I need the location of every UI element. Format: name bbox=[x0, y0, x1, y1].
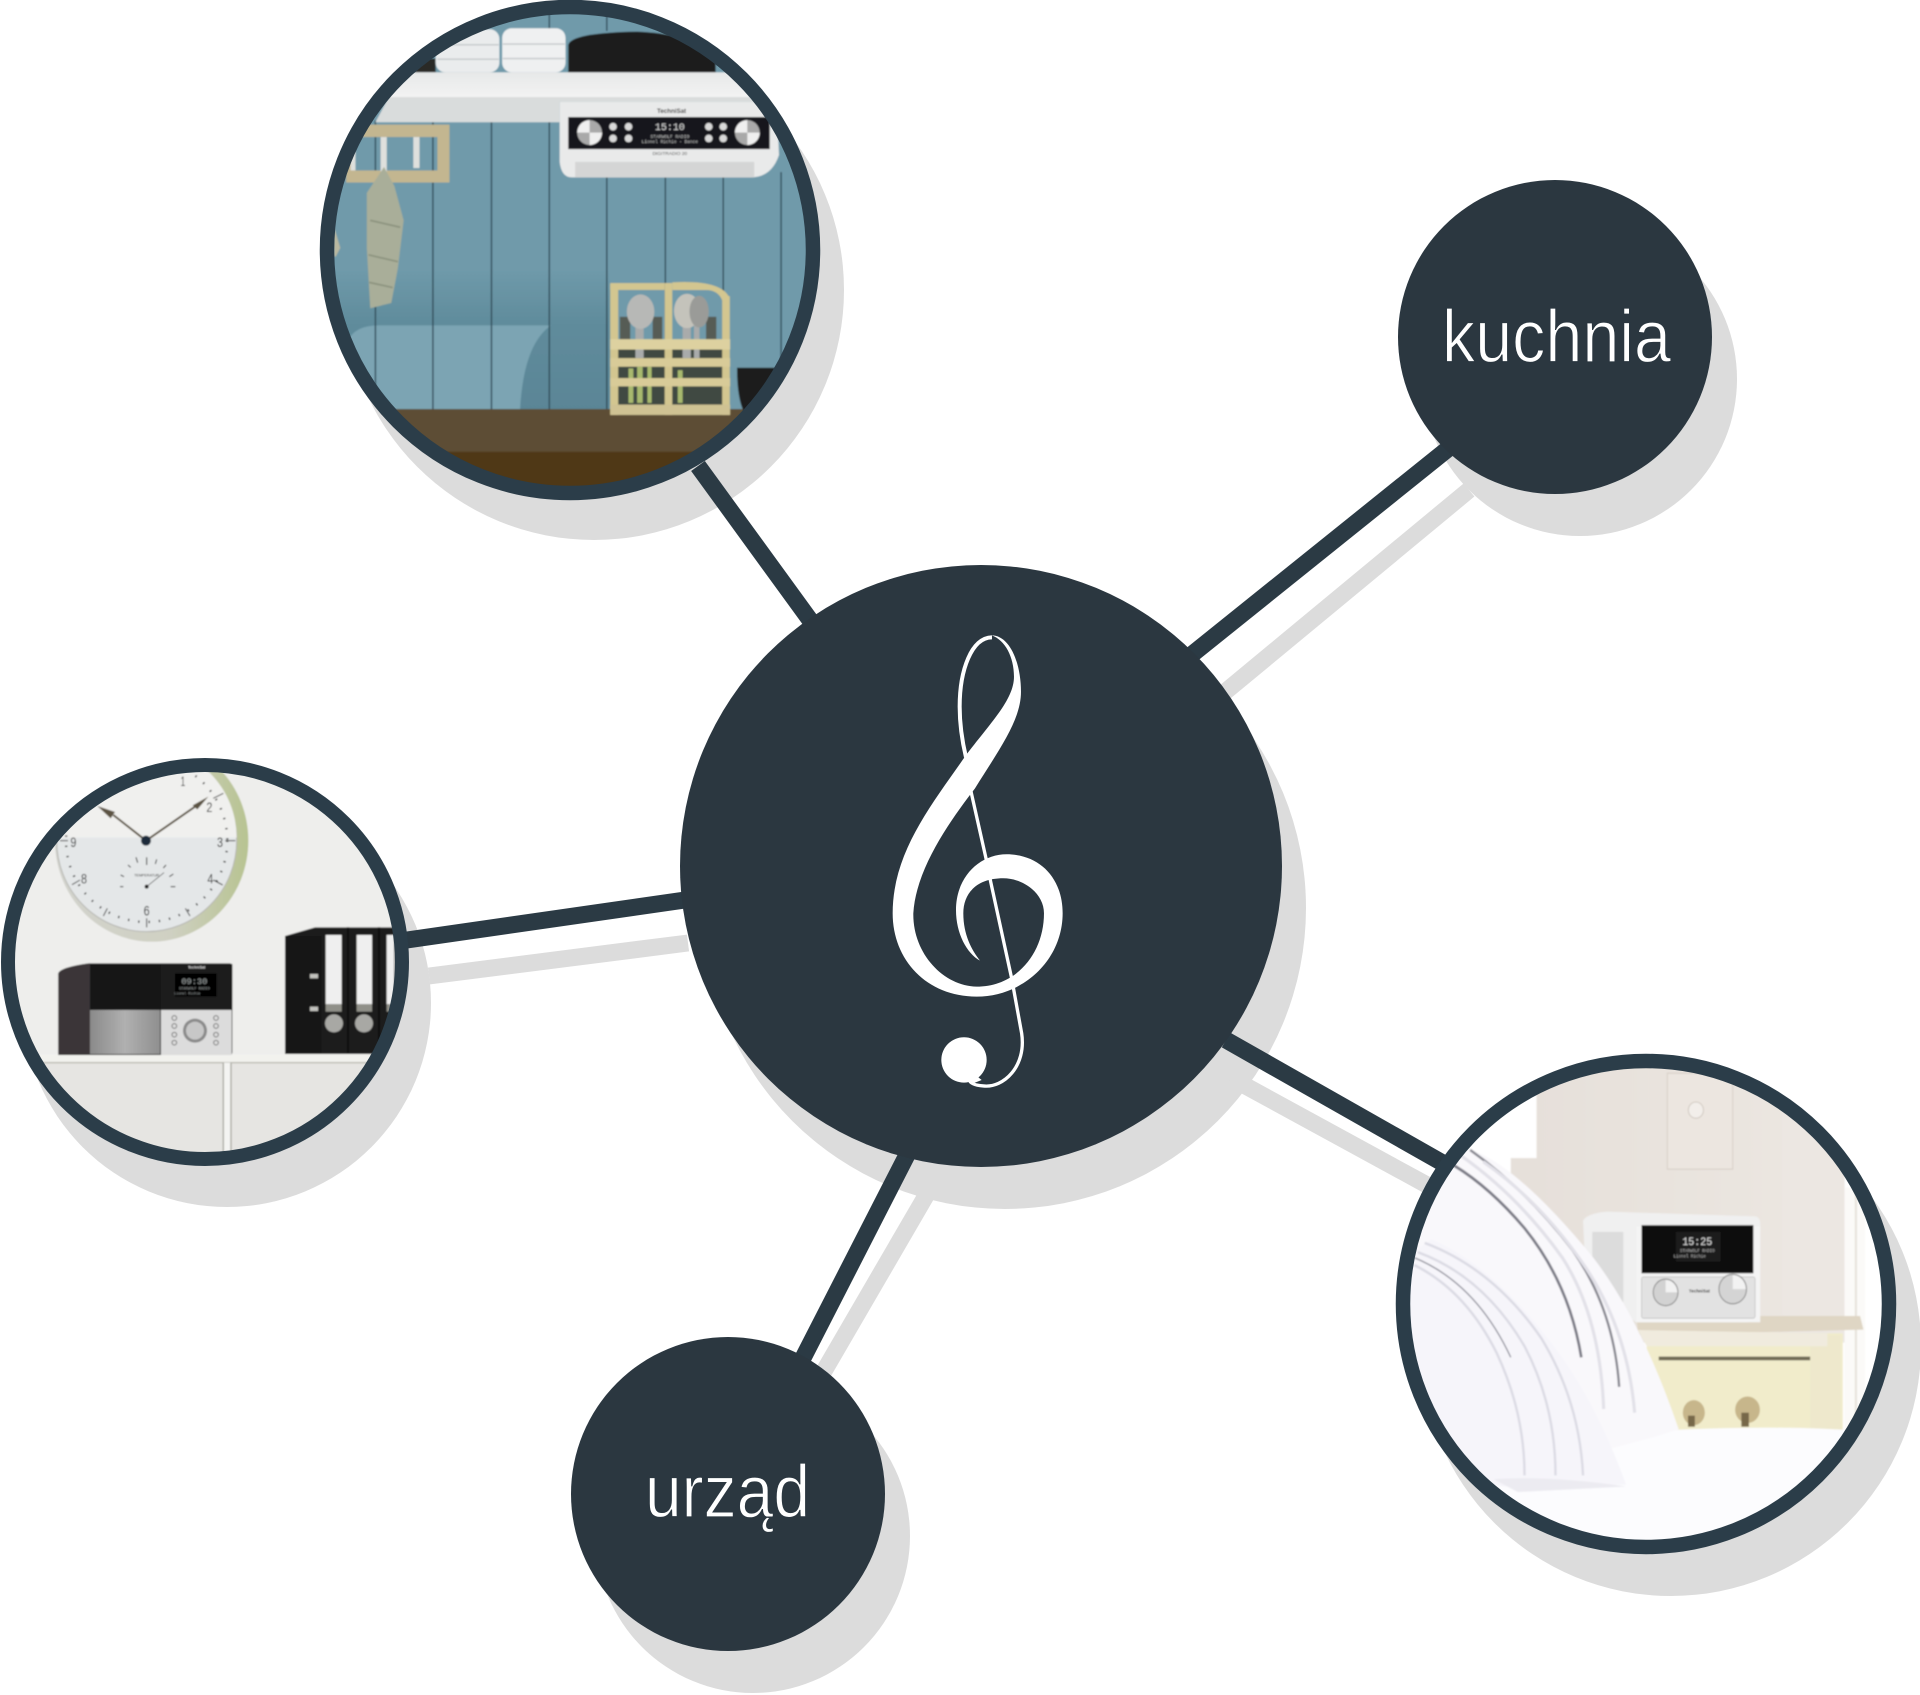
wall switch bbox=[1667, 1073, 1733, 1169]
black and silver radio: STARWOLF RADIO bbox=[179, 988, 210, 992]
small temperature dial bbox=[120, 857, 175, 889]
nightstand bbox=[1636, 1316, 1863, 1440]
wall clock: 1 bbox=[181, 773, 185, 789]
black and silver radio: TechniSat bbox=[188, 966, 206, 970]
clock hands bbox=[97, 797, 208, 841]
white digital radio: Lionel Richie bbox=[1674, 1255, 1706, 1260]
radio under shelf: DIGITRADIO 20 bbox=[652, 151, 688, 157]
bed linen bbox=[1410, 1148, 1844, 1492]
black and silver radio bbox=[58, 963, 232, 1055]
wall clock: 6 bbox=[144, 903, 150, 919]
label: urząd: urząd bbox=[645, 1450, 810, 1533]
crockery bbox=[393, 28, 716, 72]
photo: bedroom radio on nightstand bbox=[1396, 1054, 1896, 1554]
small temperature dial: TEMPERATUR bbox=[134, 874, 159, 878]
node: kuchnia label circle bbox=[1398, 180, 1712, 494]
floor bbox=[396, 408, 744, 453]
hook rack and towel bbox=[334, 125, 449, 308]
white digital radio: TechniSat bbox=[1689, 1288, 1710, 1293]
wall clock bbox=[54, 772, 249, 942]
photo: office radio with wall clock and binders bbox=[1, 758, 409, 1166]
binders bbox=[285, 927, 395, 1054]
wall clock: 2 bbox=[206, 799, 212, 815]
shelf bbox=[375, 96, 778, 122]
black and silver radio: Lionel Richie bbox=[174, 992, 200, 996]
wall clock: 8 bbox=[81, 870, 87, 886]
white digital radio bbox=[1583, 1212, 1760, 1322]
white digital radio: 15:25 bbox=[1682, 1237, 1712, 1249]
wall clock: 9 bbox=[70, 834, 77, 850]
wall clock: 4 bbox=[207, 870, 213, 886]
radio under shelf: STARWOLF RADIO bbox=[650, 134, 689, 140]
node: urząd label circle bbox=[571, 1337, 885, 1651]
icon: treble clef bbox=[893, 635, 1063, 1086]
wall clock: 3 bbox=[217, 834, 223, 850]
radio under shelf bbox=[560, 102, 779, 177]
pot bbox=[736, 366, 774, 410]
radio under shelf: 15:10 bbox=[655, 122, 685, 133]
central node with treble clef bbox=[680, 565, 1282, 1167]
cabinets bbox=[0, 1054, 440, 1064]
photo: kitchen radio under shelf bbox=[320, 0, 820, 500]
connector lines bbox=[400, 448, 1449, 1358]
black and silver radio: 09:30 bbox=[181, 977, 207, 987]
cutlery holder bbox=[610, 282, 730, 415]
white digital radio: STARWOLF RADIO bbox=[1680, 1249, 1715, 1254]
radio under shelf: Lionel Richie - Dance bbox=[642, 139, 698, 145]
label: kuchnia: kuchnia bbox=[1442, 295, 1672, 378]
radio under shelf: TechniSat bbox=[657, 108, 686, 115]
